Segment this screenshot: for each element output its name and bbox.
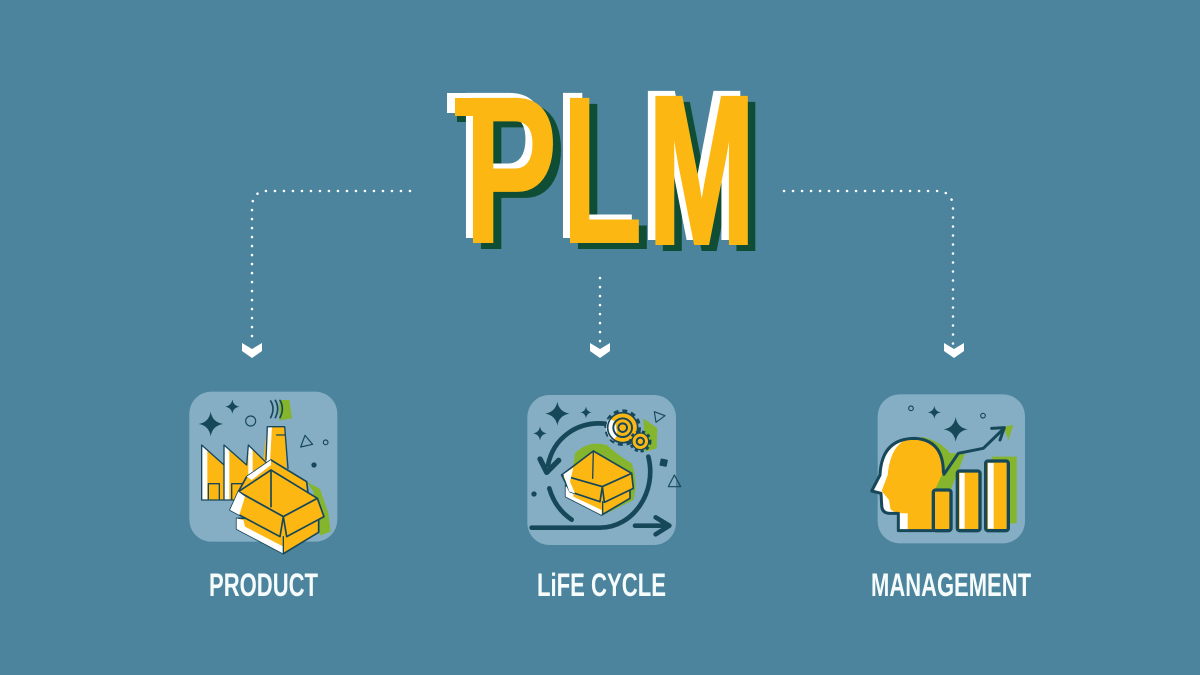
label: life cycle: LiFE CYCLE — [537, 567, 666, 603]
icon: stars and shapes — [909, 406, 985, 442]
arrow: PLM to management — [784, 191, 964, 358]
label: product: PRODUCT — [209, 567, 318, 603]
title: PLM: M — [648, 53, 755, 289]
panel: product — [189, 392, 337, 554]
title: PLM: P — [456, 48, 551, 284]
panel: life cycle — [527, 395, 681, 545]
icon: stars and shapes — [531, 402, 681, 497]
arrow: PLM to life cycle — [590, 278, 610, 358]
title: PLM: M — [656, 59, 763, 295]
label: management: MANAGEMENT — [871, 567, 1031, 603]
icon: gears — [606, 412, 657, 452]
icon: head — [872, 438, 943, 531]
title: PLM: P — [464, 53, 558, 289]
title: PLM: L — [569, 59, 651, 294]
icon: growth arrow — [944, 428, 1004, 474]
icon: factory — [202, 400, 292, 500]
icon: open box — [230, 460, 331, 554]
title: PLM: L — [561, 53, 643, 288]
title: PLM: L — [554, 48, 636, 283]
arrow: PLM to product — [242, 191, 410, 358]
icon: bar chart — [933, 461, 1008, 531]
icon: green shapes — [922, 425, 1017, 523]
icon: open box — [562, 444, 635, 515]
panel: management — [872, 394, 1025, 543]
title: PLM — [447, 48, 763, 295]
icon: cycle arrows — [532, 423, 669, 534]
icon: stars and shapes — [199, 400, 328, 468]
title: PLM: P — [472, 59, 566, 295]
title: PLM: M — [640, 48, 748, 284]
